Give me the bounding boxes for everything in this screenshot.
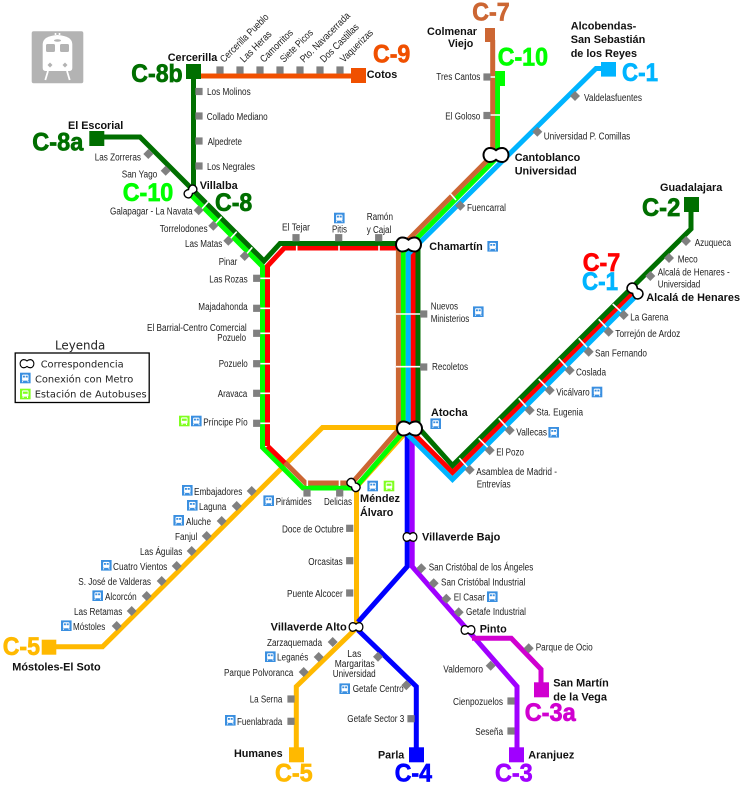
station: Los Negrales: Los Negrales [207,162,255,173]
station: San Cristóbal de los Ángeles [416,561,533,574]
line label C-1 lower: C-1 [582,268,618,296]
station: Ramón y Cajal [367,212,393,241]
station: Valdemoro: Valdemoro [443,664,483,675]
station ticks [202,77,621,486]
terminus: Cotos: Cotos [367,69,397,81]
terminus: Alcobendas-San Sebastián de los Reyes [571,20,646,60]
interchange label: Villalba: Villalba [200,180,239,192]
terminus: San Martín de la Vega [553,678,609,704]
station: San Fernando [584,347,647,360]
station: Sta. Eugenia: Sta. Eugenia [536,408,583,419]
station: Asamblea de Madrid - Entrevías [465,465,557,490]
station: El Casar: El Casar [454,593,486,604]
terminus: El Escorial: El Escorial [68,120,123,132]
station: Vaquerizas [336,28,376,74]
terminus: Guadalajara: Guadalajara [660,182,723,194]
station: Torrelodones: Torrelodones [160,224,208,235]
line C-7 red section [268,248,637,472]
station: Fuenlabrada: Fuenlabrada [237,717,283,728]
station: Meco: Meco [678,254,698,265]
interchange: Villaverde Bajo [403,533,417,541]
station: Pozuelo: Pozuelo [219,359,248,370]
station: S. José de Valderas: S. José de Valderas [78,577,151,588]
station: Las Retamas: Las Retamas [74,607,122,618]
station: Vicálvaro [545,385,602,399]
legend: interchange: Correspondencia [41,360,124,370]
station: Los Negrales [195,162,255,173]
station: Príncipe Pío: Príncipe Pío [203,418,248,428]
station: Nuevos Ministerios: Nuevos [431,302,458,313]
station: El Casar [441,591,498,604]
station: Fanjul: Fanjul [175,532,197,543]
station: Alpedrete [195,137,242,148]
station: Las Margaritas Universidad: Margaritas [335,659,375,670]
station: Pitis: Pitis [332,224,347,235]
station: La Garena [619,310,669,324]
interchange label: Pinto: Pinto [480,624,507,636]
line label C-7 red: C-7 [583,249,620,277]
interchange label: Villaverde Alto: Villaverde Alto [271,622,347,634]
station: Las Margaritas Universidad: Las [347,649,361,660]
line C-9 Cercerilla to Cotos [200,68,366,83]
station: Getafe Industrial: Getafe Industrial [466,607,526,618]
line C-7 brown section [285,28,495,483]
station: Siete Picos [276,28,316,74]
interchange label: Méndez Álvaro: Álvaro [360,506,394,519]
station: Pirámides: Pirámides [276,497,312,508]
line label C-3: C-3 [495,760,533,788]
interchange label: Atocha: Atocha [431,407,469,419]
station: Universidad P. Comillas: Universidad P. Comillas [544,132,630,143]
interchange: Pinto [461,626,475,634]
station: Coslada: Coslada [576,368,606,379]
terminus: San Martín de la Vega: de la Vega [553,692,608,704]
line C-8b Villalba to Cercerilla [186,64,201,190]
line C-1 [408,62,637,480]
station: Móstoles: Móstoles [73,622,105,633]
station: Vallecas [505,425,559,439]
terminus: Parla: Parla [378,750,405,762]
interchange label: Cantoblanco Universidad [515,152,581,178]
station: Las Rozas: Las Rozas [209,274,248,285]
terminus: Alcobendas-San Sebastián de los Reyes: San Sebastián [571,34,646,46]
station: La Serna: La Serna [250,694,283,706]
line label C-10 left: C-10 [123,179,173,207]
station: El Barrial-Centro Comercial Pozuelo: El Barrial-Centro Comercial [147,323,247,334]
interchange label: Villaverde Bajo: Villaverde Bajo [422,532,501,544]
station: Valdelasfuentes: Valdelasfuentes [584,93,642,104]
station: Coslada [565,365,606,379]
terminus: San Martín de la Vega: San Martín [553,678,609,690]
terminus: Colmenar Viejo [427,26,478,50]
station: Meco [664,253,698,265]
station: Dos Castillas [316,22,361,74]
station: Fuencarral [455,201,506,214]
station: Getafe Centro [339,680,411,695]
interchange: Villalba [183,184,198,199]
icon: train logo [32,31,83,83]
station: El Barrial-Centro Comercial Pozuelo: Pozuelo [217,333,246,344]
station: Cercerilla Pueblo: Cercerilla Pueblo [218,12,272,65]
line label C-9: C-9 [373,40,410,68]
station: Fanjul [175,531,212,543]
station: Laguna: Laguna [199,502,227,513]
terminus: Colmenar Viejo: Viejo [448,38,474,50]
station: Vicálvaro: Vicálvaro [556,388,590,399]
terminus: Alcobendas-San Sebastián de los Reyes: de los Reyes [571,48,637,60]
interchange: Chamartín [396,238,421,252]
interchange: Alcalá de Henares [625,281,645,301]
station: Fuencarral: Fuencarral [467,203,506,214]
station: Valdemoro [443,661,496,675]
station: Collado Mediano: Collado Mediano [207,112,268,123]
station: El Pozo: El Pozo [496,448,524,459]
station: Las Matas: Las Matas [185,239,222,250]
station: Seseña: Seseña [475,727,503,738]
interchange: Cantoblanco [484,148,508,162]
interchange label: Méndez Álvaro: Méndez [360,493,400,505]
station: Pinar [219,251,250,268]
station: Alcorcón: Alcorcón [105,592,137,603]
station: Recoletos [420,362,468,373]
interchange label: Chamartín: Chamartín [429,241,483,253]
station: Parque de Ocio: Parque de Ocio [536,643,593,654]
station: Móstoles [61,620,122,633]
station: Aravaca: Aravaca [218,389,248,400]
legend box [15,353,149,402]
station: Aluche: Aluche [186,517,211,528]
station: Asamblea de Madrid - Entrevías: Asamblea de Madrid - [476,467,557,478]
station: Azuqueca: Azuqueca [695,238,731,249]
line label C-8b: C-8b [131,60,183,88]
station: Torrejón de Ardoz: Torrejón de Ardoz [615,329,680,340]
station: El Goloso: El Goloso [445,112,481,123]
station: Recoletos: Recoletos [432,362,468,373]
station: Vaquerizas: Vaquerizas [338,28,376,65]
line C-3a Pinto to San Martín de la Vega [472,638,549,697]
interchange label: Alcalá de Henares: Alcalá de Henares [646,292,740,304]
station: Dos Castillas: Dos Castillas [318,22,361,65]
station: El Barrial-Centro Comercial Pozuelo [147,323,260,344]
station: Alcalá de Henares - Universidad: Universidad [658,279,700,290]
terminus: Móstoles-El Soto: Móstoles-El Soto [12,662,101,674]
legend [15,338,149,402]
line label C-3a: C-3a [525,699,577,727]
station: Leganés [265,651,324,663]
legend: metro: Conexión con Metro [35,374,133,386]
station: Las Zorreras: Las Zorreras [95,153,141,164]
station: Pto. Navacerrada [296,10,353,74]
station: Azuqueca [681,236,731,249]
station: Embajadores: Embajadores [194,487,242,498]
station: Los Molinos: Los Molinos [207,87,251,98]
station: Las Margaritas Universidad [333,649,383,680]
station: Siete Picos: Siete Picos [278,28,316,65]
station: Cuatro Vientos: Cuatro Vientos [113,562,167,573]
station: Sta. Eugenia [525,405,583,419]
station: Alpedrete: Alpedrete [208,137,242,148]
station: Laguna [187,500,242,513]
station: Alcorcón [92,590,152,603]
station: Cienpozuelos: Cienpozuelos [453,697,503,708]
station: Las Margaritas Universidad: Universidad [333,669,376,680]
station: Parque Polvoranca: Parque Polvoranca [224,668,294,679]
line C-8 and C-2 dark green [89,131,699,466]
station: El Tejar [282,223,311,241]
line label C-5 left: C-5 [3,633,40,661]
station: Aluche [173,515,227,528]
line label C-2: C-2 [642,194,680,222]
station: San Yago: San Yago [122,169,158,180]
legend title: Leyenda [55,338,105,352]
station: Las Heras: Las Heras [238,29,274,65]
station: Fuenlabrada [225,715,295,728]
terminus: Colmenar Viejo: Colmenar [427,26,478,38]
station: Ramón y Cajal: Ramón [367,212,393,223]
station: Pinar: Pinar [219,257,238,268]
station: Puente Alcocer: Puente Alcocer [287,589,343,600]
station: La Garena: La Garena [630,313,669,324]
station: Pto. Navacerrada: Pto. Navacerrada [298,10,353,65]
station: San Fernando: San Fernando [595,349,647,360]
station: Torrejón de Ardoz [604,327,680,340]
station: Delicias [324,489,352,508]
line label C-8a: C-8a [32,128,84,156]
terminus: Cercerilla: Cercerilla [168,52,218,64]
station: El Pozo [485,445,524,459]
station: Los Molinos [195,87,251,98]
station: Alcalá de Henares - Universidad [645,267,730,290]
interchange label: Atocha [430,407,469,429]
interchange label: Cantoblanco Universidad: Universidad [515,166,577,178]
station: Galapagar - La Navata: Galapagar - La Navata [110,207,193,218]
station: Príncipe Pío [179,416,260,428]
line label C-4: C-4 [395,760,432,788]
station: Majadahonda: Majadahonda [198,302,248,313]
legend: bus: Estación de Autobuses [35,388,147,400]
station: Pitis [332,213,347,241]
station: Ramón y Cajal: y Cajal [367,225,391,236]
interchange: Méndez Álvaro [345,477,362,493]
station: San Cristóbal de los Ángeles: San Cristóbal de los Ángeles [429,561,533,574]
interchange label: Méndez Álvaro [360,481,400,519]
line label C-1 top: C-1 [622,59,658,87]
station: Orcasitas: Orcasitas [308,557,343,568]
line C-5 Móstoles to Atocha and Humanes [42,428,408,762]
station: Nuevos Ministerios: Ministerios [431,314,469,325]
station: San Yago [122,166,171,180]
terminus: Aranjuez: Aranjuez [528,750,575,762]
station: Valdelasfuentes [570,91,642,104]
station: Vallecas: Vallecas [516,428,547,439]
line label C-8: C-8 [215,189,252,217]
terminus: Humanes: Humanes [234,748,283,760]
interchange: Villaverde Alto [349,623,363,631]
station: Camorritos [256,28,296,74]
terminus: Alcobendas-San Sebastián de los Reyes: Alcobendas- [571,20,637,32]
station: Zarzaquemada: Zarzaquemada [267,638,322,649]
station: Leganés: Leganés [277,652,308,663]
station: Getafe Sector 3: Getafe Sector 3 [347,714,405,725]
station: Alcalá de Henares - Universidad: Alcalá de Henares - [658,267,730,278]
station: Universidad P. Comillas [532,127,630,143]
line label C-10 right: C-10 [498,44,548,72]
line C-3 Atocha to Aranjuez [412,430,524,762]
station: Nuevos Ministerios [420,302,484,325]
station: Doce de Octubre: Doce de Octubre [282,524,344,536]
station: El Tejar: El Tejar [282,223,311,234]
station: Camorritos: Camorritos [258,28,296,65]
line C-4 Atocha to Parla [358,430,424,762]
station: Asamblea de Madrid - Entrevías: Entrevías [477,479,511,490]
station: Delicias: Delicias [324,497,352,508]
interchange label: Cantoblanco Universidad: Cantoblanco [515,152,581,164]
station: Tres Cantos: Tres Cantos [436,72,480,83]
station: Embajadores [182,485,257,498]
interchange: Atocha [397,422,422,436]
station: Getafe Centro: Getafe Centro [353,684,404,695]
line C-10 main route [186,71,505,488]
station: Las Águilas: Las Águilas [140,545,182,558]
line label C-5 bottom: C-5 [275,760,313,788]
station: San Cristóbal Industrial: San Cristóbal Industrial [441,578,525,589]
station: Pirámides [263,489,312,508]
station: Cercerilla Pueblo [216,12,272,74]
station: Las Heras [236,29,274,74]
